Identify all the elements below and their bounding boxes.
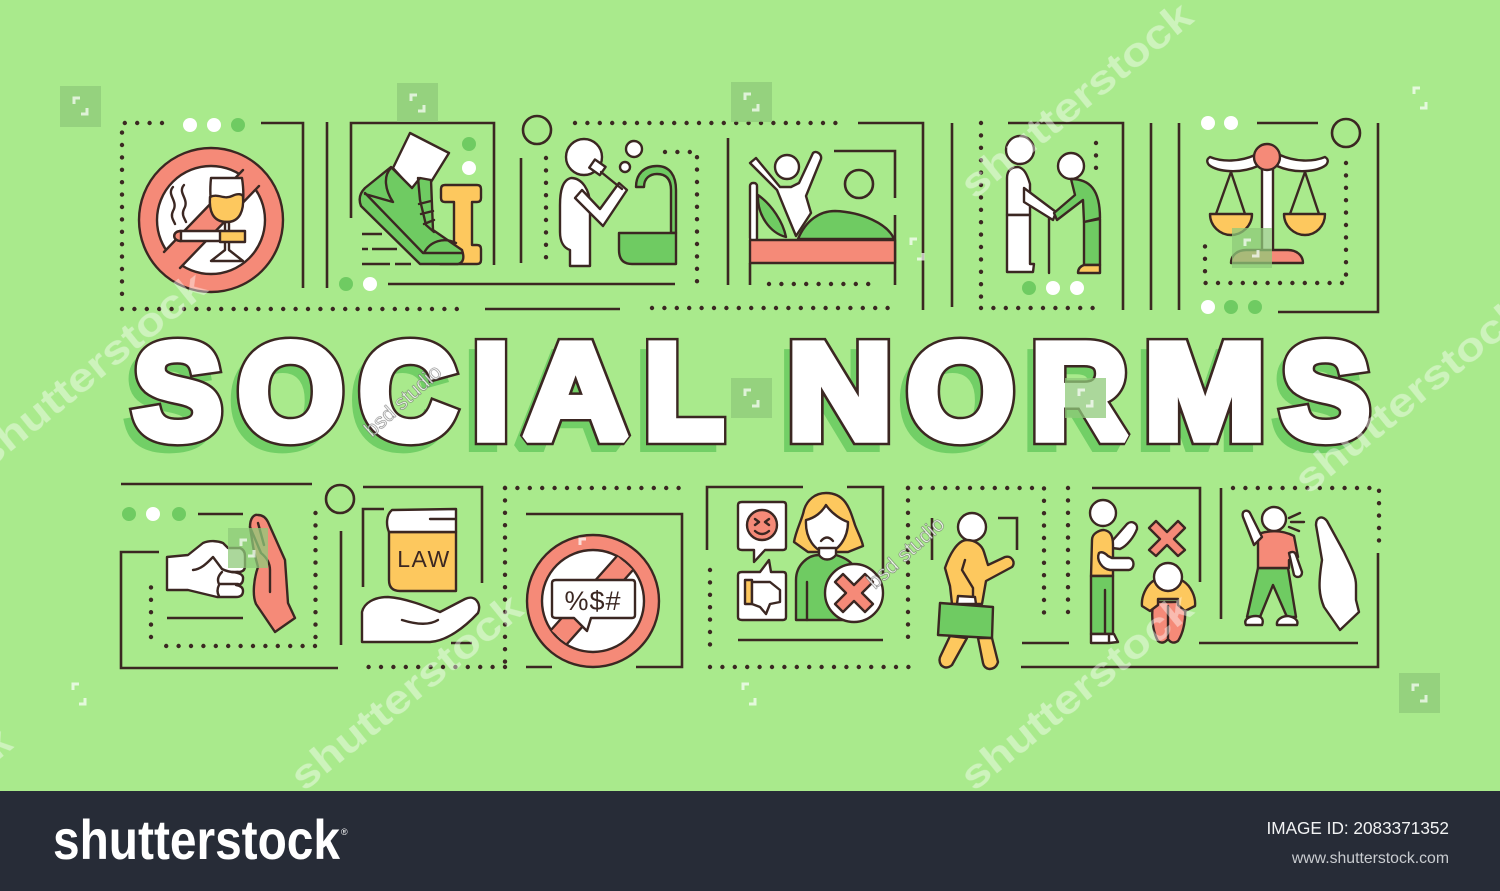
icon: fist against hand: [167, 515, 295, 632]
title: M: [1144, 316, 1265, 467]
icon: dumbbell: [440, 185, 481, 264]
title: L: [644, 317, 723, 468]
title: S: [125, 326, 214, 476]
icon: law book on hand: [362, 509, 479, 642]
title: R: [1023, 326, 1119, 476]
watermark text: shutterstock: [952, 0, 1202, 207]
swear symbols: %$#: [564, 586, 622, 616]
icon: prohibited cigarette and glass: [139, 148, 283, 292]
title: C: [360, 317, 456, 467]
panel: law: [326, 485, 505, 667]
studio watermark text: bsd studio: [863, 513, 949, 594]
title: S: [133, 317, 222, 467]
icon: sitting person: [1142, 563, 1195, 643]
title: S: [1281, 317, 1370, 467]
title: R: [1031, 317, 1127, 467]
title: A: [524, 315, 628, 467]
title: O: [238, 316, 343, 467]
icon: walker with shopping bag: [938, 513, 1014, 669]
title: S: [133, 317, 222, 467]
icon: sneaker: [360, 133, 463, 264]
title: M: [1144, 316, 1265, 467]
title: L: [644, 317, 723, 468]
title: N: [788, 315, 892, 467]
footer bar: [0, 791, 1500, 891]
watermark marks: [60, 82, 1440, 713]
icon: shouting person: [1243, 507, 1304, 625]
title: I: [465, 326, 501, 477]
icon: sad woman: [794, 493, 883, 622]
icon: person brushing teeth: [560, 139, 676, 266]
title: I: [473, 317, 509, 468]
icon: thumbs down bubble: [738, 560, 786, 620]
title: A: [524, 315, 628, 467]
panel: helping the elderly: [981, 123, 1151, 310]
studio watermark text: [360, 361, 949, 594]
title: N: [788, 315, 892, 467]
icon: open hand: [1316, 518, 1359, 630]
title: M: [1136, 325, 1257, 476]
panel: no violence: [121, 484, 338, 668]
studio watermark text: bsd studio: [360, 361, 446, 442]
title: O: [230, 325, 335, 476]
panel: upset woman: [707, 487, 910, 667]
law label: LAW: [397, 546, 451, 572]
title: S: [1273, 326, 1362, 476]
panel: person walking with bag: [908, 488, 1069, 669]
panel: brushing teeth: [339, 116, 843, 309]
icon: angry emoji bubble: [738, 502, 786, 562]
panel: blaming person: [1068, 488, 1200, 643]
panel: scales of justice: [1179, 116, 1378, 314]
title: S: [1281, 317, 1370, 467]
watermark text: shutterstock: [282, 585, 532, 799]
title: O: [907, 316, 1014, 467]
website: www.shutterstock.com: [1291, 850, 1449, 867]
panel: waking up in bed: [652, 123, 952, 310]
icon: person helping elder: [1006, 136, 1100, 273]
title: A: [516, 324, 620, 476]
image id: IMAGE ID: 2083371352: [1266, 818, 1449, 838]
panel: no swearing: [505, 488, 682, 667]
icon: person stretching in bed: [750, 152, 895, 263]
title: O: [238, 316, 343, 467]
title: O: [899, 325, 1006, 476]
watermark text: shutterstock: [952, 585, 1202, 799]
panel: raised voice and stop hand: [1021, 488, 1379, 667]
icon: X mark: [1149, 521, 1185, 556]
panel: sneaker and dumbbell: [351, 123, 494, 265]
title: I: [473, 317, 509, 468]
icon: prohibited swearing: [527, 535, 659, 667]
registered mark: ®: [341, 827, 348, 837]
icon: standing person: [1090, 500, 1137, 643]
title: [125, 315, 1370, 477]
title: C: [352, 326, 448, 476]
title: N: [780, 324, 884, 476]
icon: scales: [1207, 144, 1328, 263]
title: L: [636, 326, 715, 477]
watermark text: shutterstock: [1286, 288, 1500, 502]
panel: no smoking or drinking: [122, 118, 460, 309]
title: O: [907, 316, 1014, 467]
title: C: [360, 317, 456, 467]
shutterstock logo: shutterstock: [53, 808, 341, 871]
title: R: [1031, 317, 1127, 467]
